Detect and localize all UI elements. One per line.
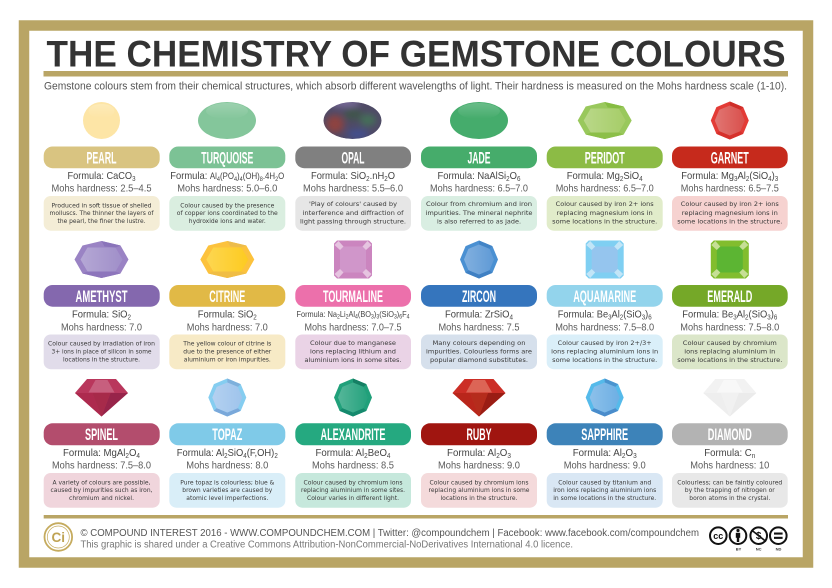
icon: pearl	[83, 102, 120, 139]
description: locations in the structure.	[63, 356, 140, 364]
formula: 2	[506, 176, 510, 183]
formula: Li	[340, 309, 346, 319]
name: ruby: RUBY	[466, 425, 492, 444]
formula: (SiO	[623, 309, 642, 321]
formula: 4	[407, 315, 410, 321]
name: pearl: PEARL	[86, 148, 116, 167]
formula: 2	[346, 315, 349, 321]
name: amethyst: AMETHYST	[76, 287, 128, 306]
formula: 2	[622, 453, 626, 460]
title rule	[44, 71, 788, 76]
description: hydroxide ions and water.	[189, 217, 266, 225]
formula: 3	[376, 315, 380, 321]
formula: 3	[371, 315, 374, 321]
icon: zircon	[460, 240, 498, 278]
hardness: Mohs hardness: 7.0–7.5	[304, 321, 402, 333]
formula: Formula: Be	[682, 309, 739, 321]
formula: 2	[224, 453, 228, 460]
description: Many colours depending on	[432, 339, 526, 347]
description	[295, 334, 411, 369]
formula: 4	[243, 453, 247, 460]
description	[547, 473, 663, 508]
name: spinel: SPINEL	[85, 425, 118, 444]
hardness: Mohs hardness: 6.5–7.0	[556, 182, 654, 194]
description: Colour caused by chromium ions	[430, 478, 529, 486]
description: molluscs. The thinner the layers of	[50, 209, 154, 217]
formula: )	[374, 309, 376, 319]
formula: Formula: Al	[316, 447, 369, 459]
formula: 3	[767, 315, 771, 322]
panel: garnet	[672, 102, 788, 231]
description: aluminium ions in some sites.	[304, 356, 402, 364]
description: replacing magnesium ions in	[682, 209, 778, 217]
icon: amethyst	[74, 241, 128, 278]
icon: citrine	[200, 241, 254, 278]
formula: Formula: Al	[170, 170, 218, 182]
formula: 3	[775, 176, 778, 183]
description: Colour caused by iron 2+/3+	[558, 339, 652, 347]
formula: Al	[738, 170, 746, 182]
formula: 2	[620, 315, 623, 322]
intro text: Gemstone colours stem from their chemical structures, which absorb different wavelengths of light. Their hardness is measured on the Mohs hardness scale (1-10).	[44, 81, 787, 93]
formula: 4	[136, 453, 140, 460]
panel: zircon	[421, 240, 537, 369]
description: ions replacing aluminium in	[684, 347, 775, 355]
description: replacing aluminium in some sites.	[301, 486, 405, 494]
description	[44, 334, 160, 369]
formula: 2	[496, 453, 500, 460]
formula: )	[771, 309, 774, 321]
icon: spinel	[75, 379, 128, 416]
description: due to the presence of either	[183, 348, 272, 356]
panel: spinel	[44, 379, 160, 508]
description	[169, 473, 285, 508]
description: Colour caused by the presence	[180, 202, 274, 210]
description: Colour caused by chromium ions	[304, 478, 403, 486]
description	[295, 473, 411, 508]
description	[547, 196, 663, 231]
formula: O	[500, 447, 507, 459]
name: diamond: DIAMOND	[708, 425, 752, 444]
description: The yellow colour of citrine is	[182, 340, 272, 348]
name: turquoise: TURQUOISE	[201, 148, 253, 167]
formula: 8	[260, 176, 263, 183]
formula: BeO	[368, 447, 387, 459]
panel: topaz	[169, 378, 285, 508]
description: replacing magnesium ions in	[557, 209, 653, 217]
formula: Formula: SiO	[311, 170, 373, 182]
title: THE CHEMISTRY OF GEMSTONE COLOURS	[46, 33, 786, 75]
panel: opal	[295, 99, 411, 231]
formula: .4H	[263, 171, 275, 181]
description: Colourless; can be faintly coloured	[677, 478, 782, 486]
description: popular diamond substitutes.	[430, 356, 528, 364]
hardness: Mohs hardness: 8.5	[312, 460, 394, 472]
name: garnet: GARNET	[711, 148, 749, 167]
formula: 3	[734, 176, 738, 183]
formula: 6	[774, 315, 777, 322]
formula: 2	[384, 176, 388, 183]
description: replacing aluminium ions in some	[428, 486, 530, 494]
formula: 6	[517, 176, 521, 183]
description: Colour from chromium and iron	[426, 200, 532, 208]
description: 3+ ions in place of silicon in some	[52, 348, 152, 356]
icon: opal	[324, 99, 382, 139]
formula: 4	[768, 176, 772, 183]
name: jade: JADE	[468, 148, 490, 167]
formula: )	[772, 170, 775, 182]
description: caused by impurities such as iron,	[50, 486, 152, 494]
description: chromium and nickel.	[69, 494, 134, 502]
hardness: Mohs hardness: 7.5	[438, 321, 520, 333]
description: some locations in the structure.	[552, 217, 657, 225]
formula: 2	[364, 453, 368, 460]
description: Colour caused by irradiation of iron	[48, 340, 155, 348]
formula: SiO	[228, 447, 243, 459]
formula: O	[129, 447, 136, 459]
icon: jade	[450, 102, 508, 139]
formula: 2	[337, 315, 340, 321]
formula: Formula: ZrSiO	[445, 309, 517, 321]
formula: 3	[507, 453, 511, 460]
hardness: Mohs hardness: 7.0	[61, 321, 142, 333]
formula: 2	[746, 176, 749, 183]
name: opal: OPAL	[342, 148, 364, 167]
formula: 6	[399, 315, 403, 321]
formula: 2	[127, 315, 131, 322]
name: tourmaline: TOURMALINE	[323, 287, 383, 306]
description: some locations in the structure.	[677, 356, 782, 364]
description	[421, 334, 537, 369]
description: ions replacing aluminium ions in	[551, 347, 658, 355]
hardness: Mohs hardness: 7.0	[187, 321, 268, 333]
formula: (F,OH)	[247, 447, 274, 459]
description: light passing through structure.	[300, 217, 406, 225]
formula: Formula: Al	[177, 447, 230, 459]
description: Colour varies in different light.	[307, 494, 399, 502]
formula: 2	[745, 315, 749, 322]
description: by the trapping of nitrogen or	[685, 486, 775, 494]
icon: creative commons badges: ND	[776, 546, 781, 551]
formula: 4	[234, 176, 238, 183]
formula: O	[278, 171, 284, 181]
description: impurities. The mineral nephrite	[426, 209, 533, 217]
formula: (PO	[220, 171, 234, 181]
icon: creative commons badges: BY	[736, 546, 742, 551]
icon: emerald	[711, 240, 749, 278]
description: Produced in soft tissue of shelled	[52, 202, 152, 210]
description	[169, 334, 285, 369]
hardness: Mohs hardness: 5.5–6.0	[303, 182, 403, 194]
description: in some locations in the structure.	[553, 494, 656, 502]
description: Colour caused by iron 2+ ions	[681, 200, 779, 208]
formula: O	[510, 170, 517, 182]
panel: aquamarine	[547, 240, 663, 369]
description: iron ions replacing aluminium ions	[553, 486, 657, 494]
formula: Formula: Mg	[567, 170, 626, 182]
hardness: Mohs hardness: 5.0–6.0	[177, 182, 277, 194]
formula: Formula: Be	[558, 309, 615, 321]
formula: F	[402, 309, 407, 319]
panel: amethyst	[44, 241, 160, 369]
description: the pearl, the finer the lustre.	[58, 217, 146, 225]
icon: creative commons badges	[710, 527, 787, 551]
icon: tourmaline	[334, 240, 372, 278]
formula: Formula: SiO	[72, 309, 134, 321]
formula: Formula: CaCO	[68, 170, 141, 182]
hardness: Mohs hardness: 8.0	[186, 460, 268, 472]
icon: turquoise	[198, 102, 256, 139]
name: aquamarine: AQUAMARINE	[573, 287, 636, 306]
hardness: Mohs hardness: 6.5–7.5	[681, 182, 779, 194]
icon: compound interest logo	[44, 523, 72, 551]
formula: Formula: Na	[296, 309, 344, 319]
icon: compound interest logo: Ci	[52, 530, 65, 545]
formula: 2	[125, 453, 129, 460]
icon: sapphire	[586, 378, 624, 416]
description: 'Play of colours' caused by	[309, 200, 397, 208]
description: impurities. Colourless forms are	[426, 347, 532, 355]
formula: Formula: Al	[447, 447, 500, 459]
description	[672, 334, 788, 369]
name: peridot: PERIDOT	[585, 148, 625, 167]
description: Colour caused by chromium	[683, 339, 777, 347]
description	[421, 473, 537, 508]
icon: garnet	[711, 102, 749, 140]
panel: jade	[421, 102, 537, 231]
formula: Al	[612, 309, 620, 321]
hardness: Mohs hardness: 9.0	[564, 460, 646, 472]
formula: Formula: Al	[573, 447, 626, 459]
formula: (SiO	[379, 309, 394, 319]
footer licence: This graphic is shared under a Creative Commons Attribution-NonCommercial-NoDerivatives International 4.0 licence.	[80, 540, 573, 550]
formula: Formula: SiO	[198, 309, 260, 321]
description: Colour caused by iron 2+ ions	[556, 200, 654, 208]
formula: 4	[355, 315, 358, 321]
formula: n	[752, 453, 755, 460]
formula: 3	[394, 315, 397, 321]
description: boron atoms in the crystal.	[689, 494, 770, 502]
formula: (OH)	[243, 171, 260, 181]
panel: diamond	[672, 379, 788, 508]
formula: )	[237, 171, 240, 181]
icon: creative commons badges: NC	[756, 546, 762, 551]
description	[547, 334, 663, 369]
hardness: Mohs hardness: 7.5–8.0	[555, 321, 654, 333]
panel: pearl	[44, 102, 160, 231]
panel: emerald	[672, 240, 788, 369]
hardness: Mohs hardness: 2.5–4.5	[52, 182, 152, 194]
formula: Al	[737, 309, 745, 321]
icon: aquamarine	[586, 240, 624, 278]
formula: 3	[633, 453, 637, 460]
panel: citrine	[169, 241, 285, 369]
description: brown varieties are caused by	[182, 486, 272, 494]
formula: .nH	[370, 170, 384, 182]
footer rule	[44, 515, 788, 518]
formula: Formula: C	[704, 447, 756, 459]
formula: (BO	[358, 309, 371, 319]
formula: 3	[608, 315, 612, 322]
formula: (SiO	[749, 309, 767, 321]
description: aluminium or iron impurities.	[184, 356, 271, 364]
description	[44, 473, 160, 508]
formula: 4	[387, 453, 391, 460]
formula: 2	[366, 176, 370, 183]
formula: 3	[733, 315, 737, 322]
icon: ruby	[452, 379, 506, 416]
formula: (SiO	[749, 170, 768, 182]
formula: 4	[217, 176, 220, 183]
formula: 2	[274, 453, 278, 460]
name: citrine: CITRINE	[209, 287, 245, 306]
description: ions replacing lithium and	[310, 347, 396, 355]
formula: SiO	[623, 170, 639, 182]
panel: tourmaline	[295, 240, 411, 369]
description	[421, 196, 537, 231]
description	[672, 196, 788, 231]
icon: creative commons badges: cc	[713, 531, 723, 541]
footer credits: © COMPOUND INTEREST 2016 - WWW.COMPOUNDCHEM.COM | Twitter: @compoundchem | Facebook: www.facebook.com/compoundchem	[80, 528, 699, 539]
description: some locations in the structure.	[677, 217, 782, 225]
formula: O	[388, 170, 395, 182]
description	[44, 196, 160, 231]
description	[295, 196, 411, 231]
description: Colour caused by titanium and	[558, 478, 651, 486]
formula: )	[397, 309, 399, 319]
formula: 2	[275, 176, 279, 183]
name: alexandrite: ALEXANDRITE	[320, 425, 386, 444]
name: topaz: TOPAZ	[212, 425, 242, 444]
icon: diamond	[703, 379, 756, 416]
formula: 4	[240, 176, 243, 183]
description: atomic level imperfections.	[186, 494, 268, 502]
description: A variety of colours are possible,	[52, 478, 150, 486]
description: interference and diffraction of	[302, 209, 404, 217]
formula: Formula: MgAl	[63, 447, 131, 459]
hardness: Mohs hardness: 7.5–8.0	[52, 460, 151, 472]
description	[169, 196, 285, 231]
name: emerald: EMERALD	[707, 287, 752, 306]
hardness: Mohs hardness: 9.0	[438, 460, 520, 472]
description: Colour due to manganese	[310, 339, 396, 347]
name: sapphire: SAPPHIRE	[581, 425, 628, 444]
panel: turquoise	[169, 102, 285, 231]
icon: peridot	[578, 102, 632, 139]
hardness: Mohs hardness: 7.5–8.0	[680, 321, 779, 333]
description: some locations in the structure.	[552, 356, 657, 364]
name: zircon: ZIRCON	[462, 287, 496, 306]
description: is also referred to as jade.	[437, 217, 521, 225]
panel: sapphire	[547, 378, 663, 508]
description: of copper ions coordinated to the	[177, 209, 278, 217]
formula: Formula: NaAlSi	[438, 170, 514, 182]
formula: O	[626, 447, 633, 459]
formula: 2	[253, 315, 257, 322]
formula: Formula: Mg	[681, 170, 740, 182]
formula: Al	[348, 309, 355, 319]
formula: 3	[642, 315, 645, 322]
formula: 6	[648, 315, 652, 322]
icon: alexandrite	[334, 378, 372, 416]
panel: peridot	[547, 102, 663, 231]
formula: 2	[620, 176, 623, 183]
description	[672, 473, 788, 508]
hardness: Mohs hardness: 10	[690, 460, 769, 472]
description: Pure topaz is colourless; blue &	[180, 478, 274, 486]
panel: alexandrite	[295, 378, 411, 508]
hardness: Mohs hardness: 6.5–7.0	[430, 182, 528, 194]
description: locations in the structure.	[440, 494, 518, 502]
icon: creative commons badges: $	[756, 531, 762, 542]
formula: 4	[509, 315, 513, 322]
panel: ruby	[421, 379, 537, 508]
icon: topaz	[208, 378, 246, 416]
formula: )	[645, 309, 648, 321]
formula: 3	[132, 176, 136, 183]
formula: 4	[639, 176, 643, 183]
